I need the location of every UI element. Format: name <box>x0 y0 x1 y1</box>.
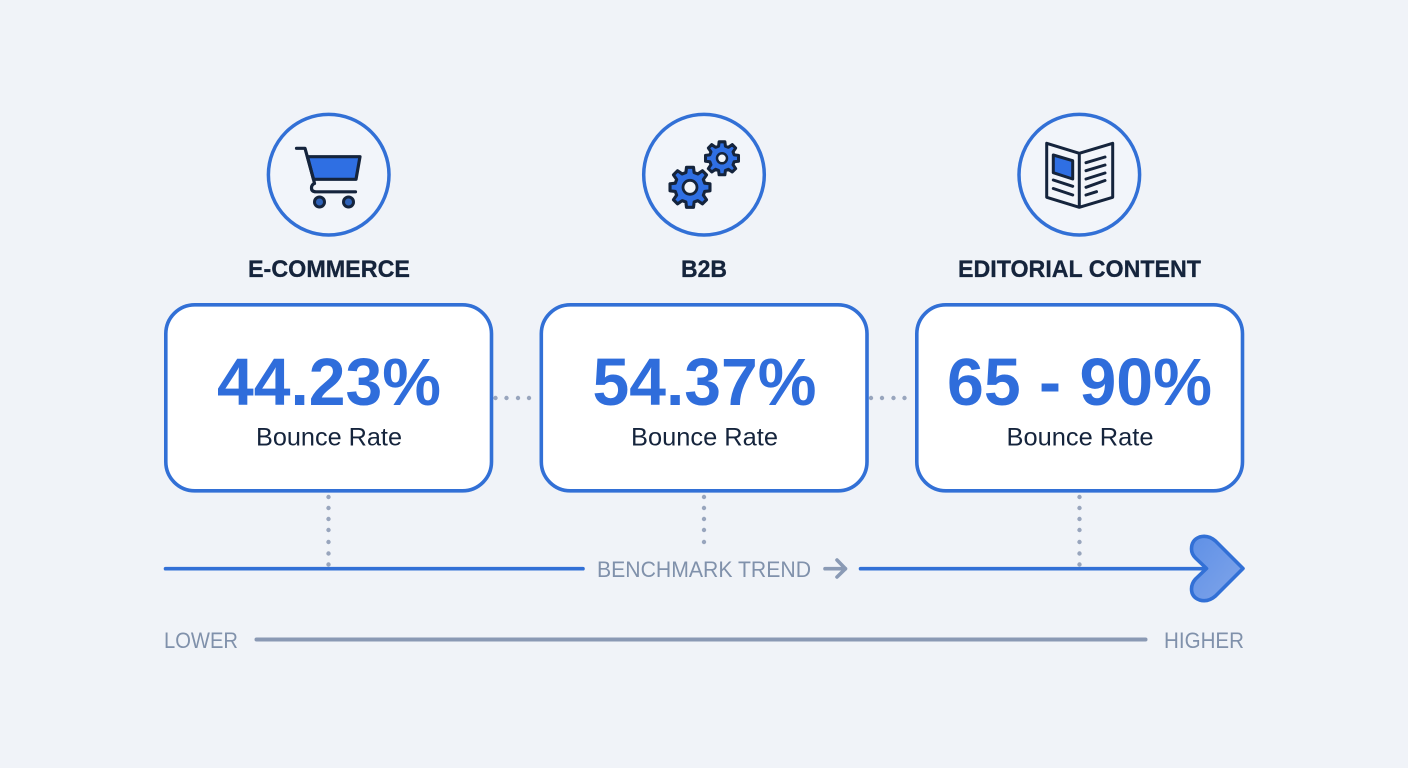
label: higher: HIGHER <box>1164 628 1244 653</box>
label: bounce rate: Bounce Rate <box>256 424 402 452</box>
heading: e-commerce: E-COMMERCE <box>248 256 410 283</box>
label: benchmark trend: BENCHMARK TREND <box>597 557 811 582</box>
connector: dotted drops from cards to trend line <box>326 495 1082 567</box>
card: e-commerce bounce rate <box>166 305 492 491</box>
heading: b2b: B2B <box>681 256 727 283</box>
value: 54.37%: 54.37% <box>592 345 816 420</box>
label: bounce rate: Bounce Rate <box>1006 424 1154 452</box>
icon: gears <box>644 114 764 235</box>
scale: lower to higher <box>164 628 1244 653</box>
icon: shopping cart <box>268 114 389 235</box>
arrowhead <box>1192 536 1243 601</box>
connector: dotted lines between cards <box>493 396 907 400</box>
icon: small arrow <box>825 560 846 577</box>
heading: editorial content: EDITORIAL CONTENT <box>958 256 1201 283</box>
panel: e-commerce <box>166 114 492 491</box>
panel: editorial content <box>917 114 1242 491</box>
card: editorial bounce rate <box>917 305 1242 491</box>
value: 44.23%: 44.23% <box>217 345 441 420</box>
card: b2b bounce rate <box>541 305 867 491</box>
panel: b2b <box>541 114 867 491</box>
label: bounce rate: Bounce Rate <box>631 424 778 452</box>
icon: open magazine <box>1019 114 1140 235</box>
value: 65 - 90%: 65 - 90% <box>947 345 1212 420</box>
label: lower: LOWER <box>164 628 238 653</box>
benchmark trend arrow <box>166 536 1243 601</box>
